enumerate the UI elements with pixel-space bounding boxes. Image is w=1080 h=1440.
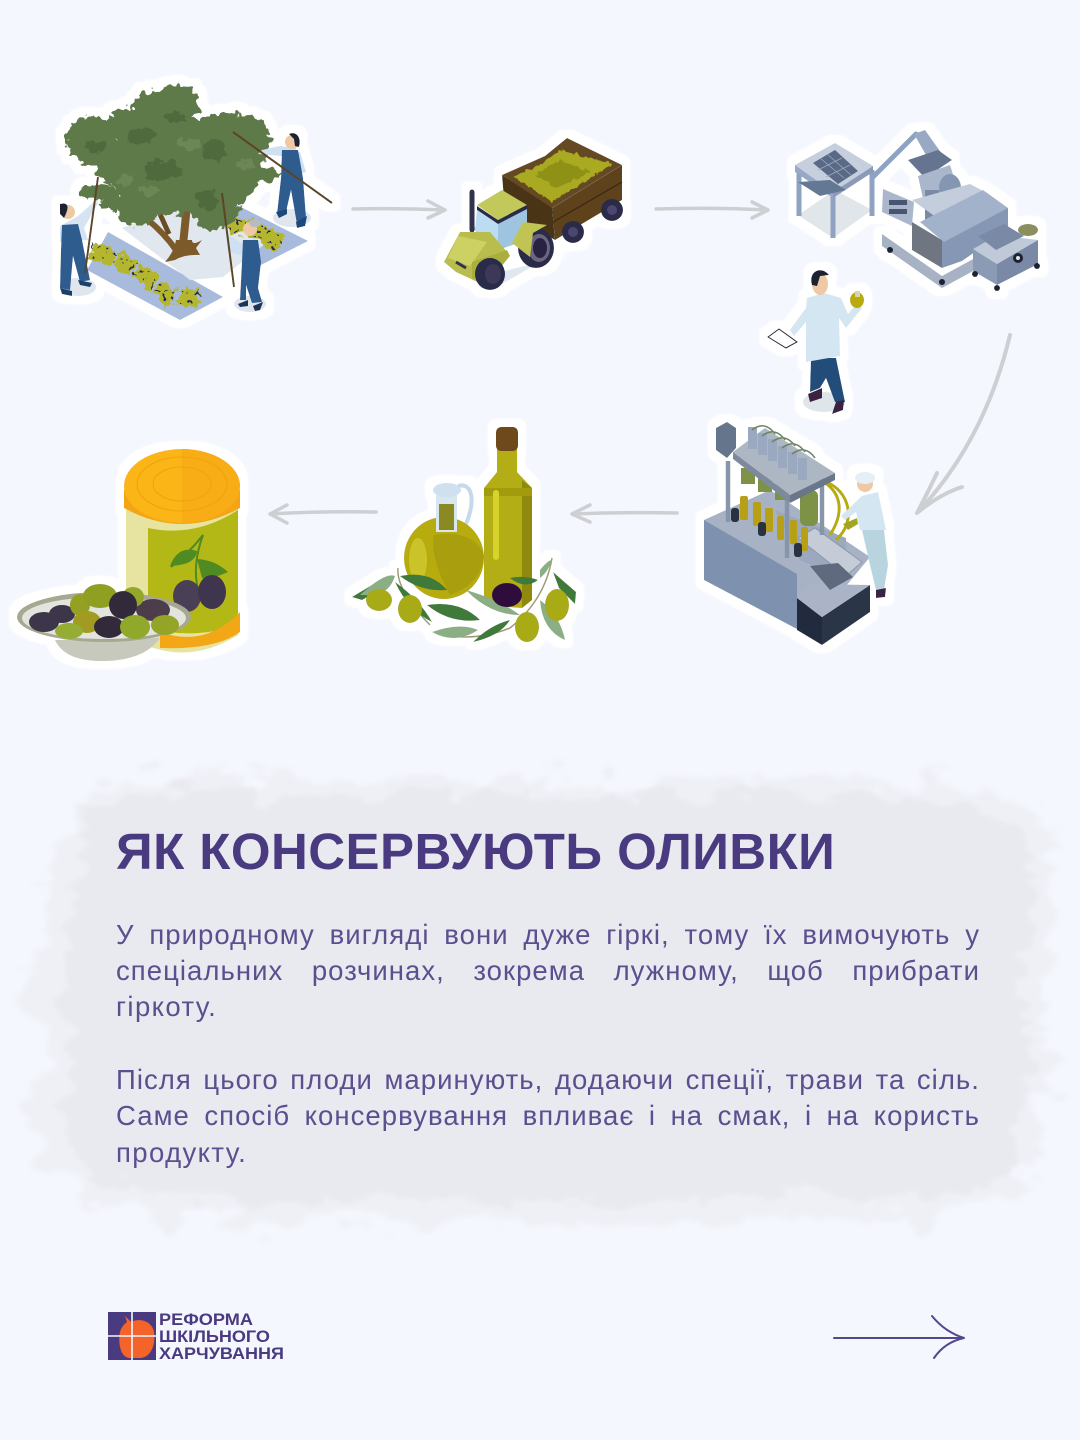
footer arrow	[834, 1316, 964, 1358]
shadow	[803, 392, 845, 412]
arrow: harvest to transport	[353, 201, 445, 218]
tractor body	[444, 190, 547, 284]
olive branches	[352, 558, 576, 642]
textured background blotch	[34, 772, 1056, 1228]
tree trunk	[147, 205, 202, 262]
control box	[797, 584, 870, 645]
trailer	[502, 138, 622, 240]
factory worker	[841, 472, 888, 598]
tree foliage	[67, 85, 280, 230]
top platform	[733, 426, 835, 503]
illustration: olive oil	[352, 427, 576, 642]
logo wordmark: ШКІЛЬНОГО	[159, 1328, 270, 1346]
bowl	[17, 592, 191, 661]
can body	[126, 490, 240, 652]
worker right	[233, 132, 332, 228]
bottles	[740, 496, 808, 551]
logo wordmark	[159, 1311, 284, 1363]
worker left	[60, 177, 98, 296]
illustration: processing machinery	[795, 130, 1040, 291]
jug sphere	[404, 483, 484, 599]
illustration: olive harvest	[60, 85, 332, 320]
body text: Після цього плоди маринують, додаючи спеції, трави та сіль.	[116, 1064, 980, 1095]
paragraph 2	[116, 1064, 980, 1168]
illustration: canned olives	[17, 449, 240, 661]
main machine body	[882, 184, 1008, 285]
body text: продукту.	[116, 1137, 247, 1168]
jug handle	[458, 485, 472, 524]
sorting table	[795, 143, 873, 238]
harvest cloths	[87, 202, 308, 320]
legs	[810, 358, 845, 402]
body text: гіркоту.	[116, 991, 217, 1022]
head	[811, 270, 829, 295]
mill hopper	[908, 130, 961, 224]
conveyor belt	[798, 528, 862, 576]
shoes	[808, 388, 844, 414]
conveyor hood	[810, 563, 853, 590]
hoses	[820, 480, 848, 540]
paragraph 1	[116, 919, 980, 1022]
can lid	[124, 449, 240, 524]
trailer wheels	[562, 199, 623, 243]
conveyor	[872, 134, 916, 178]
title: ЯК КОНСЕРВУЮТЬ ОЛИВКИ	[116, 823, 835, 880]
arrow: pressing to bottling	[917, 335, 1010, 513]
label branch	[170, 535, 228, 612]
body text: У природному вигляді вони дуже гіркі, тому їх вимочують у	[116, 919, 980, 950]
dark olive	[492, 583, 522, 607]
flask	[850, 291, 864, 308]
rear tractor wheel	[518, 228, 554, 268]
filling columns	[728, 461, 822, 558]
harvested olives	[92, 220, 282, 303]
lab coat	[790, 293, 862, 362]
tractor shadow	[470, 228, 600, 285]
clipboard	[768, 329, 797, 348]
olives in bowl	[29, 584, 179, 639]
arrow: transport to pressing	[656, 202, 768, 218]
logo mark	[108, 1312, 156, 1360]
logo wordmark: ХАРЧУВАННЯ	[159, 1345, 284, 1363]
worker middle	[222, 193, 266, 312]
illustration: bottling line	[704, 422, 888, 645]
body text: спеціальних розчинах, зокрема лужному, щоб прибрати	[116, 955, 980, 986]
olives	[366, 589, 569, 642]
grain load	[513, 150, 612, 202]
control cabinet	[716, 422, 736, 458]
arrow: bottling to oil	[572, 505, 677, 522]
front wheel	[475, 258, 505, 290]
oil bottle	[484, 427, 532, 608]
logo wordmark: РЕФОРМА	[159, 1311, 253, 1329]
illustration: lab technician	[768, 270, 864, 414]
illustration: tractor with trailer	[444, 138, 623, 290]
filling nozzles	[741, 468, 818, 526]
arrow: oil to canned olives	[270, 505, 376, 523]
main machine base	[882, 234, 975, 288]
body text: Саме спосіб консервування впливає і на смак, і на користь	[116, 1100, 980, 1131]
secondary machine	[972, 224, 1040, 291]
machine base	[704, 490, 870, 629]
bottle clamps	[731, 508, 802, 557]
